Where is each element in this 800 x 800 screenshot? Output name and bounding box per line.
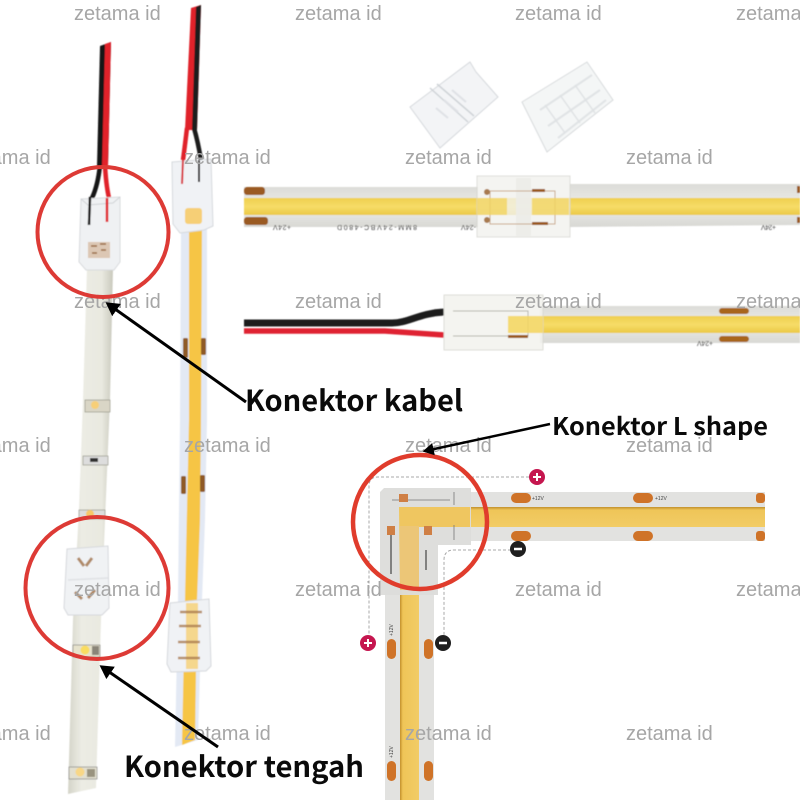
clear connector parts bbox=[410, 62, 613, 152]
yellow COB line: row 1 bbox=[244, 198, 800, 215]
watermarks: zetama id bbox=[74, 579, 161, 601]
icon: plus terminal top bbox=[529, 469, 545, 485]
icon: minus terminal top bbox=[510, 541, 526, 557]
voltage labels: L-shape: +12V bbox=[389, 746, 395, 758]
voltage labels: L-shape: +12V bbox=[532, 496, 544, 502]
yellow COB line: second strip bbox=[182, 228, 202, 745]
voltage labels: L-shape bbox=[389, 496, 667, 758]
label: Konektor L shape: Konektor L shape bbox=[552, 407, 768, 442]
watermarks: zetama id bbox=[405, 147, 492, 169]
wire connector: row 2 bbox=[444, 295, 543, 350]
watermarks: zetama id bbox=[626, 147, 713, 169]
closed connector clip bbox=[522, 62, 613, 152]
solder pads: second strip bbox=[181, 338, 206, 494]
watermarks: zetama id bbox=[405, 435, 492, 457]
COB strip: second strip bbox=[175, 228, 207, 747]
watermarks: zetama id bbox=[295, 3, 382, 25]
watermarks: zetama id bbox=[295, 291, 382, 313]
solder pads: row 2 bbox=[719, 308, 749, 342]
arrow: L connector bbox=[425, 424, 550, 451]
arrow: middle connector bbox=[102, 667, 218, 747]
watermarks: zetama id bbox=[184, 723, 271, 745]
second strip with wire and connectors bbox=[167, 5, 213, 747]
wire connector: left strip bbox=[79, 197, 120, 270]
strip body: row 1 bbox=[244, 187, 478, 227]
middle connector: left strip bbox=[64, 546, 109, 615]
strip markings: row 1: 8MM-24VBC-480D bbox=[337, 223, 417, 230]
watermarks: zetama id bbox=[295, 579, 382, 601]
solder pads: row 1 bbox=[244, 186, 800, 225]
dashed wiring guide: negative bbox=[444, 550, 511, 636]
wire pair: left strip bbox=[92, 42, 111, 198]
watermarks: zetama id bbox=[74, 291, 161, 313]
strip markings: row 1: +24V bbox=[273, 223, 291, 230]
open connector clip bbox=[410, 62, 498, 148]
LED chips: left strip bbox=[69, 400, 110, 779]
watermarks: zetama id bbox=[515, 3, 602, 25]
L-shape strip bbox=[360, 469, 765, 800]
watermarks: zetama id bbox=[626, 435, 713, 457]
silicone tube: left strip bbox=[68, 268, 113, 794]
watermarks: zetama id bbox=[515, 579, 602, 601]
strip markings: row 1: -24V bbox=[461, 223, 476, 230]
yellow COB line: row 2 bbox=[508, 316, 800, 333]
highlight circle: middle connector bbox=[26, 517, 168, 659]
wire pair: row 2 bbox=[244, 312, 444, 335]
horizontal strip with wire connector bbox=[244, 295, 800, 350]
watermarks: zetama id bbox=[405, 723, 492, 745]
wire connector: second strip bbox=[172, 159, 213, 233]
strip body: row 2 bbox=[540, 306, 800, 343]
watermarks: zetama id bbox=[184, 147, 271, 169]
left strip with wire and connectors bbox=[64, 42, 120, 794]
highlight circle: wire connector bbox=[38, 167, 168, 297]
middle connector: row 1 bbox=[477, 176, 570, 237]
strip markings: row 1 bbox=[273, 223, 776, 230]
icon: plus terminal left bbox=[360, 635, 376, 651]
watermarks: zetama id bbox=[626, 723, 713, 745]
highlight circle: L connector bbox=[353, 455, 487, 589]
wire pair: second strip bbox=[183, 5, 201, 160]
dashed wiring guide: positive bbox=[369, 477, 529, 636]
L connector bbox=[380, 488, 471, 595]
yellow COB line: L-shape bbox=[470, 507, 765, 527]
strip body: L-shape bbox=[385, 492, 765, 800]
voltage labels: L-shape: +12V bbox=[655, 496, 667, 502]
voltage labels: L-shape: +12V bbox=[389, 624, 395, 636]
watermarks: zetama id bbox=[74, 3, 161, 25]
horizontal strip with middle connector bbox=[244, 176, 800, 237]
strip markings: row 2: +24V bbox=[697, 339, 713, 346]
middle connector: second strip bbox=[167, 599, 211, 672]
label: Konektor tengah: Konektor tengah bbox=[124, 744, 364, 786]
solder pads: L-shape bbox=[387, 493, 765, 781]
strip markings: row 1: +24V bbox=[761, 223, 776, 230]
watermarks: zetama id bbox=[184, 435, 271, 457]
arrow: wire connector bbox=[108, 304, 246, 402]
icon: minus terminal right bbox=[435, 635, 451, 651]
label: Konektor kabel: Konektor kabel bbox=[245, 378, 463, 420]
watermarks: zetama id bbox=[515, 291, 602, 313]
